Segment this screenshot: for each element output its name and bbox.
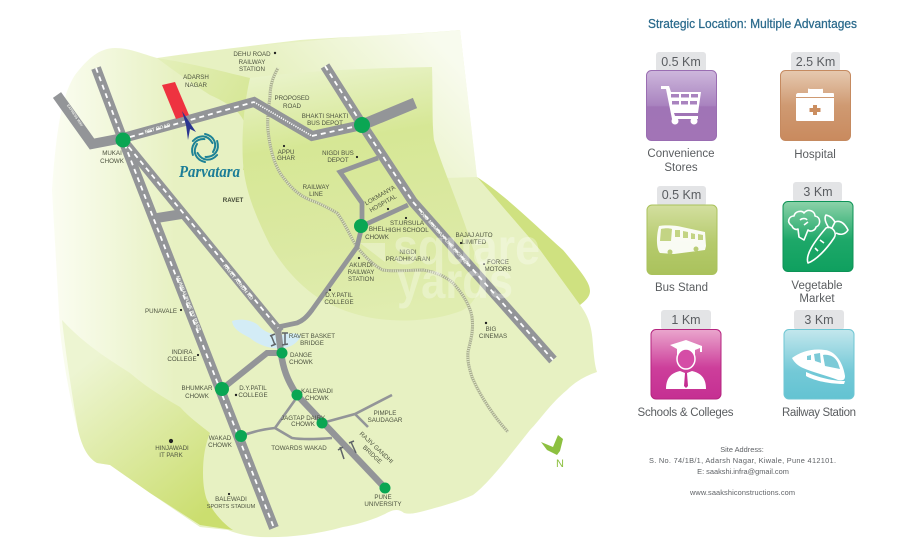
road labels: MUMBAI-PUNE BY PASS: [174, 275, 202, 333]
road labels: BRT ROAD: [144, 122, 172, 136]
road labels: RAVET AUNDH RD: [221, 263, 254, 302]
site address: Site Address:: [720, 445, 764, 454]
road: Ravet Aundh road: [123, 140, 280, 332]
road: east branch: [362, 103, 415, 125]
site address: www.saakshiconstructions.com: [689, 488, 795, 497]
site address: S. No. 74/1B/1, Adarsh Nagar, Kiwale, Pune 412101.: [649, 456, 836, 465]
watermark: square: [393, 219, 540, 275]
label: Nigdi Pradhikaran: PRADHIKARAN: [386, 256, 430, 263]
road: Old Mumbai Pune highway: [325, 66, 553, 360]
card: Vegetable Market: Vegetable: [791, 280, 843, 292]
label: Balewadi: BALEWADI: [215, 496, 247, 503]
label: Akurdi: RAILWAY: [348, 269, 374, 276]
junction markers: [116, 117, 390, 494]
label: Ravet Basket Bridge: BRIDGE: [300, 340, 324, 347]
label: Lokmanya Hospital: HOSPITAL: [368, 193, 399, 214]
label: Railway Line: LINE: [309, 191, 323, 198]
label: Towards Wakad: TOWARDS WAKAD: [271, 445, 327, 452]
map background: right edge green band: [477, 177, 590, 305]
label: Ravet Basket Bridge: RAVET BASKET: [289, 333, 335, 340]
label: Force Motors: MOTORS: [484, 266, 512, 273]
heading: Strategic Location: Strategic Location: Multiple Advantages: [648, 17, 857, 31]
label: St Ursula: ST.URSULA: [390, 220, 425, 227]
label: Bhumkar Chowk: BHUMKAR: [182, 385, 213, 392]
label: Bajaj Auto: LIMITED: [462, 239, 487, 246]
map background: pale fade on upper right: [200, 30, 477, 180]
label: Akurdi: AKURDI: [349, 262, 373, 269]
label: Big Cinemas: [479, 322, 507, 340]
label: Indira College: [167, 349, 199, 363]
label: D.Y. Patil north: [324, 289, 354, 306]
road labels: [66, 104, 472, 333]
road: Bhel Chowk connector: [362, 205, 408, 226]
label: Balewadi: [207, 493, 256, 510]
label: Wakad Chowk: [208, 435, 233, 449]
card: Convenience Stores: Convenience: [647, 148, 715, 160]
label: Appu Ghar: GHAR: [277, 155, 295, 162]
label: Mukai Chowk: MUKAI: [102, 150, 122, 157]
road labels: EXPRESS WAY: [66, 104, 84, 128]
label: Bajaj Auto: [455, 232, 493, 246]
label: Big Cinemas: CINEMAS: [479, 333, 507, 340]
label: Kalewadi Chowk: KALEWADI: [301, 388, 333, 395]
label: Railway Line: [303, 184, 329, 198]
label: Indira College: COLLEGE: [167, 356, 197, 363]
label: Bhakti Shakti: BUS DEPOT: [307, 120, 343, 127]
label: Bajaj Auto: BAJAJ AUTO: [455, 232, 493, 239]
label: Mukai Chowk: [100, 150, 125, 165]
map background: light green land: [52, 30, 597, 537]
logo wordmark: Parvatara: [178, 162, 240, 181]
label: Bhumkar Chowk: CHOWK: [185, 393, 210, 400]
card: Railway Station: 3 Km: [804, 313, 834, 327]
label: Dehu Road: [233, 51, 276, 73]
card: Convenience Stores: 0.5 Km: [661, 55, 701, 69]
label: Wakad Chowk: WAKAD: [209, 435, 232, 442]
watermark: [360, 219, 540, 309]
label: Pimple Saudagar: SAUDAGAR: [368, 417, 403, 424]
label: Jagtap Chowk: [281, 415, 325, 428]
Parvatara logo: [178, 132, 240, 181]
label: D.Y. Patil south: D.Y.PATIL: [239, 385, 267, 392]
bridges: [270, 333, 356, 459]
label: Nigdi Bus Depot: DEPOT: [327, 157, 349, 164]
road: lane markings: [96, 66, 553, 528]
card: Schools and Colleges: 1 Km: [671, 313, 701, 327]
label: D.Y. Patil north: COLLEGE: [324, 299, 354, 306]
card: Vegetable Market: Market: [799, 293, 835, 305]
north arrow: [541, 435, 564, 470]
card: Schools and Colleges: Schools & Colleges: [638, 407, 734, 419]
icon: bus: [657, 225, 706, 254]
label: Wakad Chowk: CHOWK: [208, 442, 233, 449]
label: Hinjawadi IT Park: HINJAWADI: [155, 445, 189, 452]
label: Railway Line: RAILWAY: [303, 184, 329, 191]
card: Convenience Stores: Stores: [664, 162, 698, 174]
icon: shopping cart: [661, 86, 701, 124]
icon: train: [792, 349, 845, 384]
label: Proposed Road: [274, 95, 310, 110]
road: Dange to Bhumkar: [222, 353, 282, 389]
map place labels: [100, 51, 512, 510]
label: Akurdi: [348, 257, 374, 283]
label: Jagtap Chowk: CHOWK: [291, 421, 316, 428]
map background: darker top band: [157, 58, 375, 170]
label: Adarsh Nagar: ADARSH: [183, 74, 209, 81]
label: Dehu Road: DEHU ROAD: [233, 51, 271, 58]
label: Dange Chowk: [289, 352, 314, 366]
label: Adarsh Nagar: [183, 74, 209, 89]
card: Convenience Stores: [646, 52, 716, 174]
card: Railway Station: [782, 310, 856, 419]
label: Ravet: RAVET: [223, 197, 243, 204]
label: St Ursula: HIGH SCHOOL: [385, 227, 429, 234]
label: Mukai Chowk: CHOWK: [100, 158, 125, 165]
label: D.Y. Patil north: D.Y.PATIL: [325, 292, 353, 299]
label: Dange Chowk: DANGE: [290, 352, 312, 359]
label: Nigdi Bus Depot: [322, 150, 358, 164]
icon: broccoli and carrot: [789, 210, 848, 263]
label: Force Motors: FORCE: [487, 259, 509, 266]
card: Hospital: 2.5 Km: [796, 55, 835, 69]
label: Bhel Chowk: CHOWK: [365, 234, 390, 241]
road: Mumbai Pune by pass: [96, 68, 274, 528]
card: Vegetable Market: 3 Km: [803, 185, 833, 199]
road: thin local roads near Wakad and Pimple Saudagar: [241, 395, 392, 439]
card: Hospital: Hospital: [794, 149, 836, 161]
blue location arrow: [182, 111, 196, 140]
label: Rajiv Gandhi Bridge: BRIDGE: [361, 444, 383, 466]
north arrow: N: [556, 458, 564, 470]
label: Nigdi Pradhikaran: [386, 249, 430, 263]
label: D.Y. Patil south: [235, 385, 268, 399]
label: Dehu Road: STATION: [239, 66, 265, 73]
label: Nigdi Pradhikaran: NIGDI: [399, 249, 417, 256]
label: Kalewadi Chowk: [301, 388, 333, 402]
label: Bhakti Shakti: BHAKTI SHAKTI: [302, 113, 348, 120]
label: Punavale: PUNAVALE: [145, 308, 177, 315]
label: Bhumkar Chowk: [182, 385, 213, 400]
label: St Ursula: [385, 217, 429, 234]
label: Akurdi: STATION: [348, 276, 374, 283]
card: Schools and Colleges: [638, 310, 734, 419]
watermark: yards: [397, 253, 513, 309]
label: Bhel Chowk: [365, 226, 390, 241]
road labels: OLD MUMBAI PUNE HIGHWAY: [418, 210, 472, 269]
label: Pune University: [364, 494, 402, 508]
site address: E: saakshi.infra@gmail.com: [697, 467, 789, 476]
label: Bhel Chowk: BHEL: [369, 226, 386, 233]
card: Vegetable Market: [783, 182, 853, 305]
label: Jagtap Chowk: JAGTAP DAIRY: [281, 415, 325, 422]
icon: medical case: [796, 89, 834, 121]
card: Bus Stand: 0.5 Km: [662, 188, 701, 202]
label: Big Cinemas: BIG: [486, 326, 497, 333]
map background: lower-left green area: [62, 320, 233, 530]
label: D.Y. Patil south: COLLEGE: [238, 392, 268, 399]
label: Rajiv Gandhi Bridge: RAJIV GANDHI: [358, 431, 394, 465]
label: Appu Ghar: [277, 145, 295, 162]
label: Proposed Road: ROAD: [283, 103, 301, 110]
label: Indira College: INDIRA: [172, 349, 193, 356]
label: Dehu Road: RAILWAY: [239, 59, 265, 66]
card: Bus Stand: [647, 186, 717, 294]
card: Railway Station: Railway Station: [782, 407, 856, 419]
road: connector between highways: [157, 214, 182, 218]
label: Dange Chowk: CHOWK: [289, 359, 314, 366]
red site marker: [162, 82, 189, 119]
label: Bhakti Shakti: [302, 113, 348, 127]
label: Kalewadi Chowk: CHOWK: [305, 395, 330, 402]
label: Pimple Saudagar: [368, 410, 403, 424]
label: Adarsh Nagar: NAGAR: [185, 82, 208, 89]
icon: graduate: [666, 340, 706, 389]
label: Ravet Basket Bridge: [289, 333, 335, 347]
label: Balewadi: SPORTS STADIUM: [207, 504, 256, 510]
site address: [649, 445, 836, 497]
label: Proposed Road: PROPOSED: [274, 95, 310, 102]
label: Hinjawadi IT Park: IT PARK: [159, 452, 184, 459]
label: Pune University: PUNE: [374, 494, 392, 501]
road: Nigdi to Ravet link: [278, 158, 378, 327]
card: Hospital: [780, 52, 850, 161]
label: Pimple Saudagar: PIMPLE: [374, 410, 396, 417]
label: Lokmanya Hospital: LOKMANYA: [364, 184, 397, 207]
label: Nigdi Bus Depot: NIGDI BUS: [322, 150, 354, 157]
logo emblem: [188, 132, 222, 164]
label: Pune University: UNIVERSITY: [364, 501, 402, 508]
map background: central mid-green area: [242, 67, 480, 321]
label: Appu Ghar: APPU: [278, 149, 294, 156]
card: Bus Stand: Bus Stand: [655, 282, 708, 294]
water body: [232, 320, 301, 348]
roads: [57, 66, 553, 528]
road: Ravet Basket to Pune University: [278, 330, 385, 488]
road: BRT road: [57, 95, 362, 144]
label: Hinjawadi IT Park: [155, 439, 189, 459]
railway line: [268, 68, 508, 432]
label: Force Motors: [483, 259, 512, 273]
